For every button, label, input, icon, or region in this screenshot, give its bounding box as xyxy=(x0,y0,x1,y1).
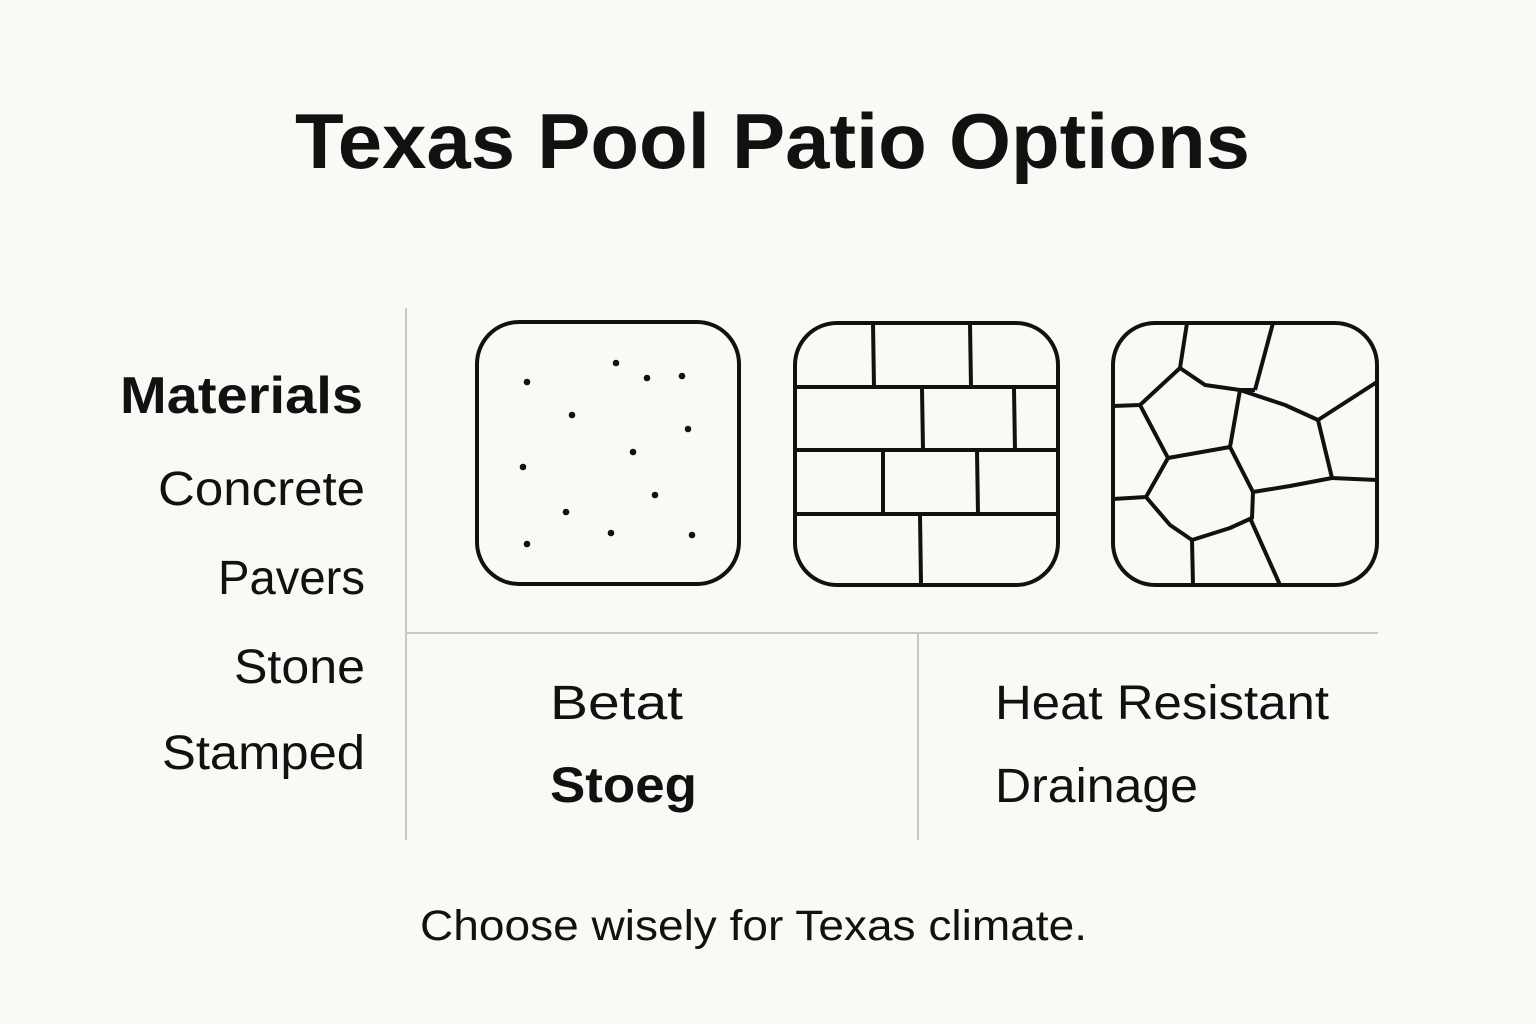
title: Texas Pool Patio Options xyxy=(295,97,1250,185)
text: stamped: Stamped xyxy=(162,727,365,780)
icon: concrete xyxy=(477,322,739,584)
text: betat / stoeg xyxy=(550,677,697,813)
icon: pavers xyxy=(795,323,1058,585)
footer caption: Choose wisely for Texas climate. xyxy=(420,902,1087,950)
text: heat resistant / drainage: Drainage xyxy=(995,760,1198,813)
text: betat / stoeg: Betat xyxy=(550,677,683,730)
text: pavers: Pavers xyxy=(218,552,365,605)
materials list xyxy=(120,367,365,780)
text: stone: Stone xyxy=(234,641,365,694)
icon: stone xyxy=(1113,323,1377,585)
text: concrete: Concrete xyxy=(158,463,365,516)
text: heat resistant / drainage: Heat Resistant xyxy=(995,677,1329,730)
text: betat / stoeg: Stoeg xyxy=(550,757,697,813)
text: heat resistant / drainage xyxy=(995,677,1329,813)
heading: materials: Materials xyxy=(120,367,363,425)
